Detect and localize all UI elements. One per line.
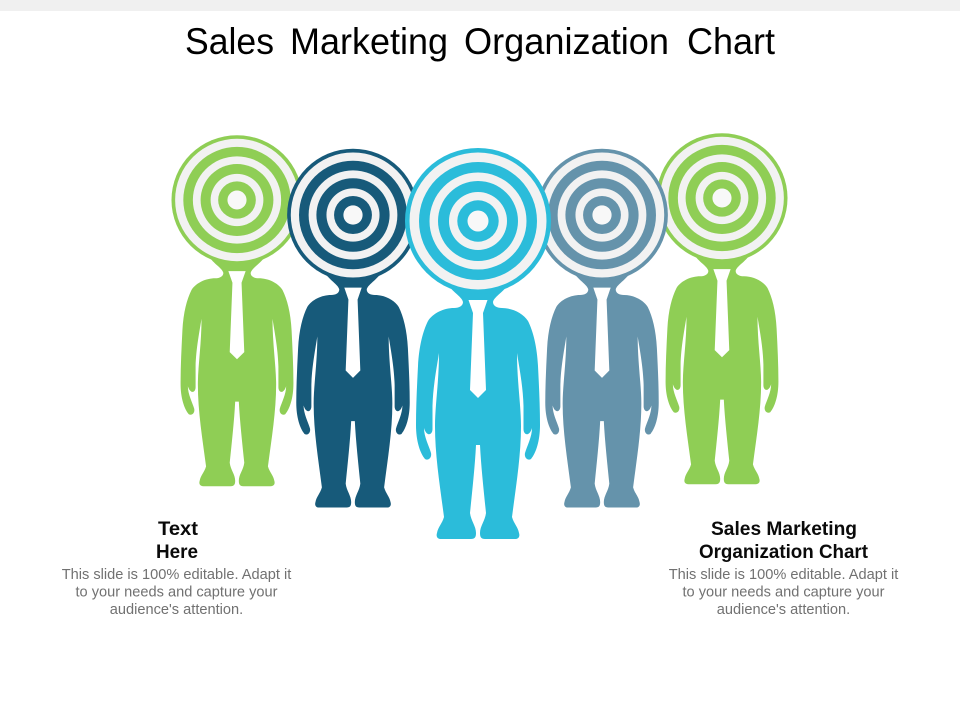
right heading: Organization Chart <box>699 542 869 563</box>
right text block <box>669 519 898 618</box>
title <box>185 21 776 62</box>
left heading: Text <box>158 519 199 540</box>
title: Marketing <box>290 21 448 62</box>
figure: navy person <box>287 149 419 508</box>
left heading <box>156 519 199 563</box>
left text block <box>62 519 291 618</box>
title: Sales <box>185 21 274 62</box>
left heading: Here <box>156 542 198 563</box>
title: Organization <box>464 21 669 62</box>
figure: right green person <box>656 133 788 484</box>
left description: to your needs and capture your <box>75 584 278 600</box>
right heading <box>699 519 869 563</box>
right description: audience's attention. <box>717 602 850 618</box>
top bar <box>0 0 960 11</box>
right description: to your needs and capture your <box>682 584 885 600</box>
figure: center cyan person <box>405 148 551 539</box>
title: Chart <box>687 21 776 62</box>
figure: slate blue person <box>536 149 668 508</box>
figure: left green person <box>171 135 303 486</box>
right description: This slide is 100% editable. Adapt it <box>669 567 898 583</box>
left description: audience's attention. <box>110 602 243 618</box>
right heading: Sales Marketing <box>711 519 857 540</box>
left description: This slide is 100% editable. Adapt it <box>62 567 291 583</box>
